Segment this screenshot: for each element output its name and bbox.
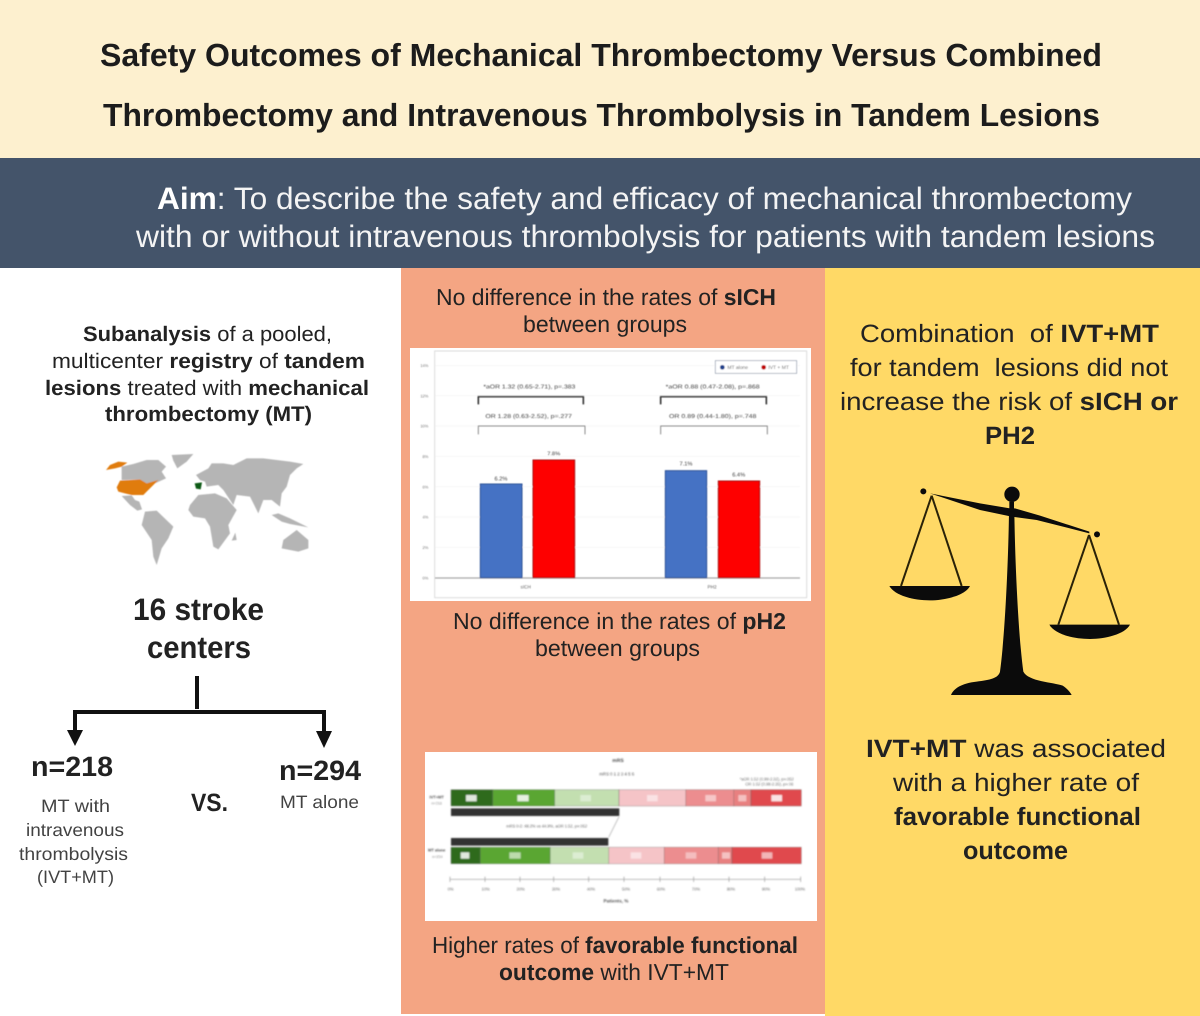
study description: multicenter registry of tandem [52, 350, 365, 373]
sICH finding [436, 284, 776, 337]
group: MT alone: n=294 [279, 755, 361, 786]
stacked bar chart: mRS distribution: 80% [727, 887, 735, 892]
conclusion: efficacy: favorable functional [894, 803, 1141, 831]
chart heading: mRS [612, 758, 624, 763]
stacked bar chart: mRS distribution: 100% [795, 887, 805, 892]
stacked bar chart: mRS distribution: Patients, % [604, 898, 629, 904]
bar values: 6.4% [732, 472, 745, 478]
group: MT alone: MT alone [280, 792, 359, 812]
aim banner [0, 158, 1200, 268]
group: IVT+MT: intravenous [26, 820, 124, 840]
conclusion: safety: increase the risk of sICH or [840, 388, 1178, 416]
odds ratios: *aOR 0.88 (0.47-2.08), p=.868 [666, 383, 760, 390]
study description: lesions treated with mechanical [45, 377, 369, 400]
row labels: MT alone [428, 848, 445, 852]
conclusion: safety: for tandem lesions did not [850, 354, 1168, 382]
stacked bar chart: mRS distribution: 90% [762, 887, 770, 892]
y axis labels: 8% [423, 454, 428, 459]
vs label: VS. [191, 789, 228, 817]
bar values: 6.2% [495, 475, 507, 482]
conclusion: safety: Combination of IVT+MT [860, 320, 1159, 348]
odds ratios: OR 1.28 (0.63-2.52), p=.277 [485, 413, 572, 419]
16 stroke centers [133, 592, 264, 665]
group: IVT+MT: thrombolysis [19, 844, 128, 864]
x axis labels [520, 584, 717, 590]
panel: conclusions [825, 268, 1200, 1016]
study description: thrombectomy (MT) [105, 403, 312, 426]
y axis labels [420, 363, 428, 580]
y axis labels: 2% [423, 545, 428, 550]
group: IVT+MT: n=218 [31, 751, 113, 782]
functional outcome finding: Higher rates of favorable functional [432, 932, 798, 958]
stacked bar chart: mRS distribution: n=294 [432, 855, 442, 859]
group: IVT+MT: (IVT+MT) [37, 867, 114, 887]
stacked bar chart: mRS distribution: 10% [482, 887, 490, 892]
x axis labels: sICH [520, 584, 531, 590]
odds ratios: OR 0.89 (0.44-1.80), p=.748 [669, 413, 756, 419]
aim statement: with or without intravenous thrombolysis for patients with tandem lesions [135, 219, 1155, 254]
comparison note: mRS 0-2: 48.2% vs 44.9%, aOR 1.52, p=.052 [506, 824, 587, 828]
bars [480, 484, 522, 578]
stacked bar chart: mRS distribution: 30% [552, 887, 560, 892]
odds ratios: *aOR 1.32 (0.65-2.71), p=.383 [483, 383, 575, 390]
stacked bar chart: mRS distribution: n=218 [432, 801, 442, 805]
top bar: IVT+MT [451, 790, 801, 806]
functional outcome finding [432, 932, 798, 985]
y axis labels: 0% [423, 576, 428, 580]
aim statement: Aim: To describe the safety and efficacy of mechanical thrombectomy [157, 181, 1133, 216]
conclusion: safety [840, 320, 1178, 450]
stacked bar chart: mRS distribution: *aOR 1.52 (0.99-2.32), p=.052 [740, 777, 794, 782]
row labels [428, 795, 445, 852]
arrow: split to both groups [67, 676, 332, 748]
segment value chips [461, 795, 782, 859]
y axis labels: 14% [420, 363, 428, 368]
legend [715, 361, 797, 373]
x axis [450, 877, 801, 882]
conclusion: efficacy: IVT+MT was associated [866, 735, 1166, 763]
group: IVT+MT [19, 751, 128, 887]
bottom bar: MT alone [451, 838, 608, 846]
title [100, 37, 1102, 133]
aim statement [135, 181, 1155, 254]
conclusion: efficacy: outcome [963, 837, 1068, 865]
PH2 finding [453, 608, 786, 661]
title banner [0, 0, 1200, 158]
stacked bar chart: mRS distribution: 50% [622, 887, 630, 892]
y axis labels: 4% [423, 515, 428, 520]
bar values: 7.1% [680, 461, 692, 467]
sICH finding: between groups [523, 311, 687, 337]
group: IVT+MT: MT with [41, 796, 110, 816]
legend: MT alone [727, 365, 748, 370]
stacked bar chart: mRS distribution: 20% [517, 887, 525, 892]
16 stroke centers: 16 stroke [133, 592, 264, 627]
title: Safety Outcomes of Mechanical Thrombectomy Versus Combined [100, 37, 1102, 73]
functional outcome finding: outcome with IVT+MT [499, 959, 729, 985]
conclusion: safety: PH2 [985, 422, 1035, 450]
panel: study design [0, 268, 400, 1016]
row labels: IVT+MT [429, 795, 444, 800]
bar chart: sICH and PH2 rates [410, 348, 811, 601]
study description [45, 323, 369, 426]
legend: IVT + MT [768, 365, 789, 370]
PH2 finding: No difference in the rates of pH2 [453, 608, 786, 634]
y axis labels: 12% [420, 394, 428, 398]
group: MT alone [279, 755, 361, 812]
bar values: 7.8% [547, 450, 560, 457]
16 stroke centers: centers [147, 630, 251, 665]
stacked bar chart: mRS distribution: OR 1.52 (0.98-2.35), p=.06 [745, 782, 793, 786]
stacked bar chart: mRS distribution: mRS 0 1 2 3 4 5 6 [599, 771, 634, 776]
title: Thrombectomy and Intravenous Thrombolysis in Tandem Lesions [103, 97, 1100, 133]
icon: balance scale [889, 486, 1130, 695]
panel: outcomes [401, 268, 825, 1014]
conclusion: efficacy [866, 735, 1166, 865]
sICH finding: No difference in the rates of sICH [436, 284, 776, 310]
y axis labels: 6% [423, 485, 428, 489]
bar values [495, 450, 745, 482]
stacked bar chart: mRS distribution [425, 752, 817, 921]
conclusion: efficacy: with a higher rate of [892, 769, 1139, 797]
stacked bar chart: mRS distribution: 40% [587, 887, 595, 892]
stacked bar chart: mRS distribution: 70% [692, 887, 700, 892]
study description: Subanalysis of a pooled, [83, 323, 332, 346]
stacked bar chart: mRS distribution: 60% [657, 887, 665, 892]
x axis labels: PH2 [707, 584, 717, 590]
PH2 finding: between groups [535, 635, 700, 661]
stacked bar chart: mRS distribution: 0% [448, 887, 454, 892]
brackets [478, 397, 767, 434]
y axis labels: 10% [420, 424, 428, 429]
icon: world map [106, 454, 309, 565]
odds ratios [483, 383, 760, 419]
